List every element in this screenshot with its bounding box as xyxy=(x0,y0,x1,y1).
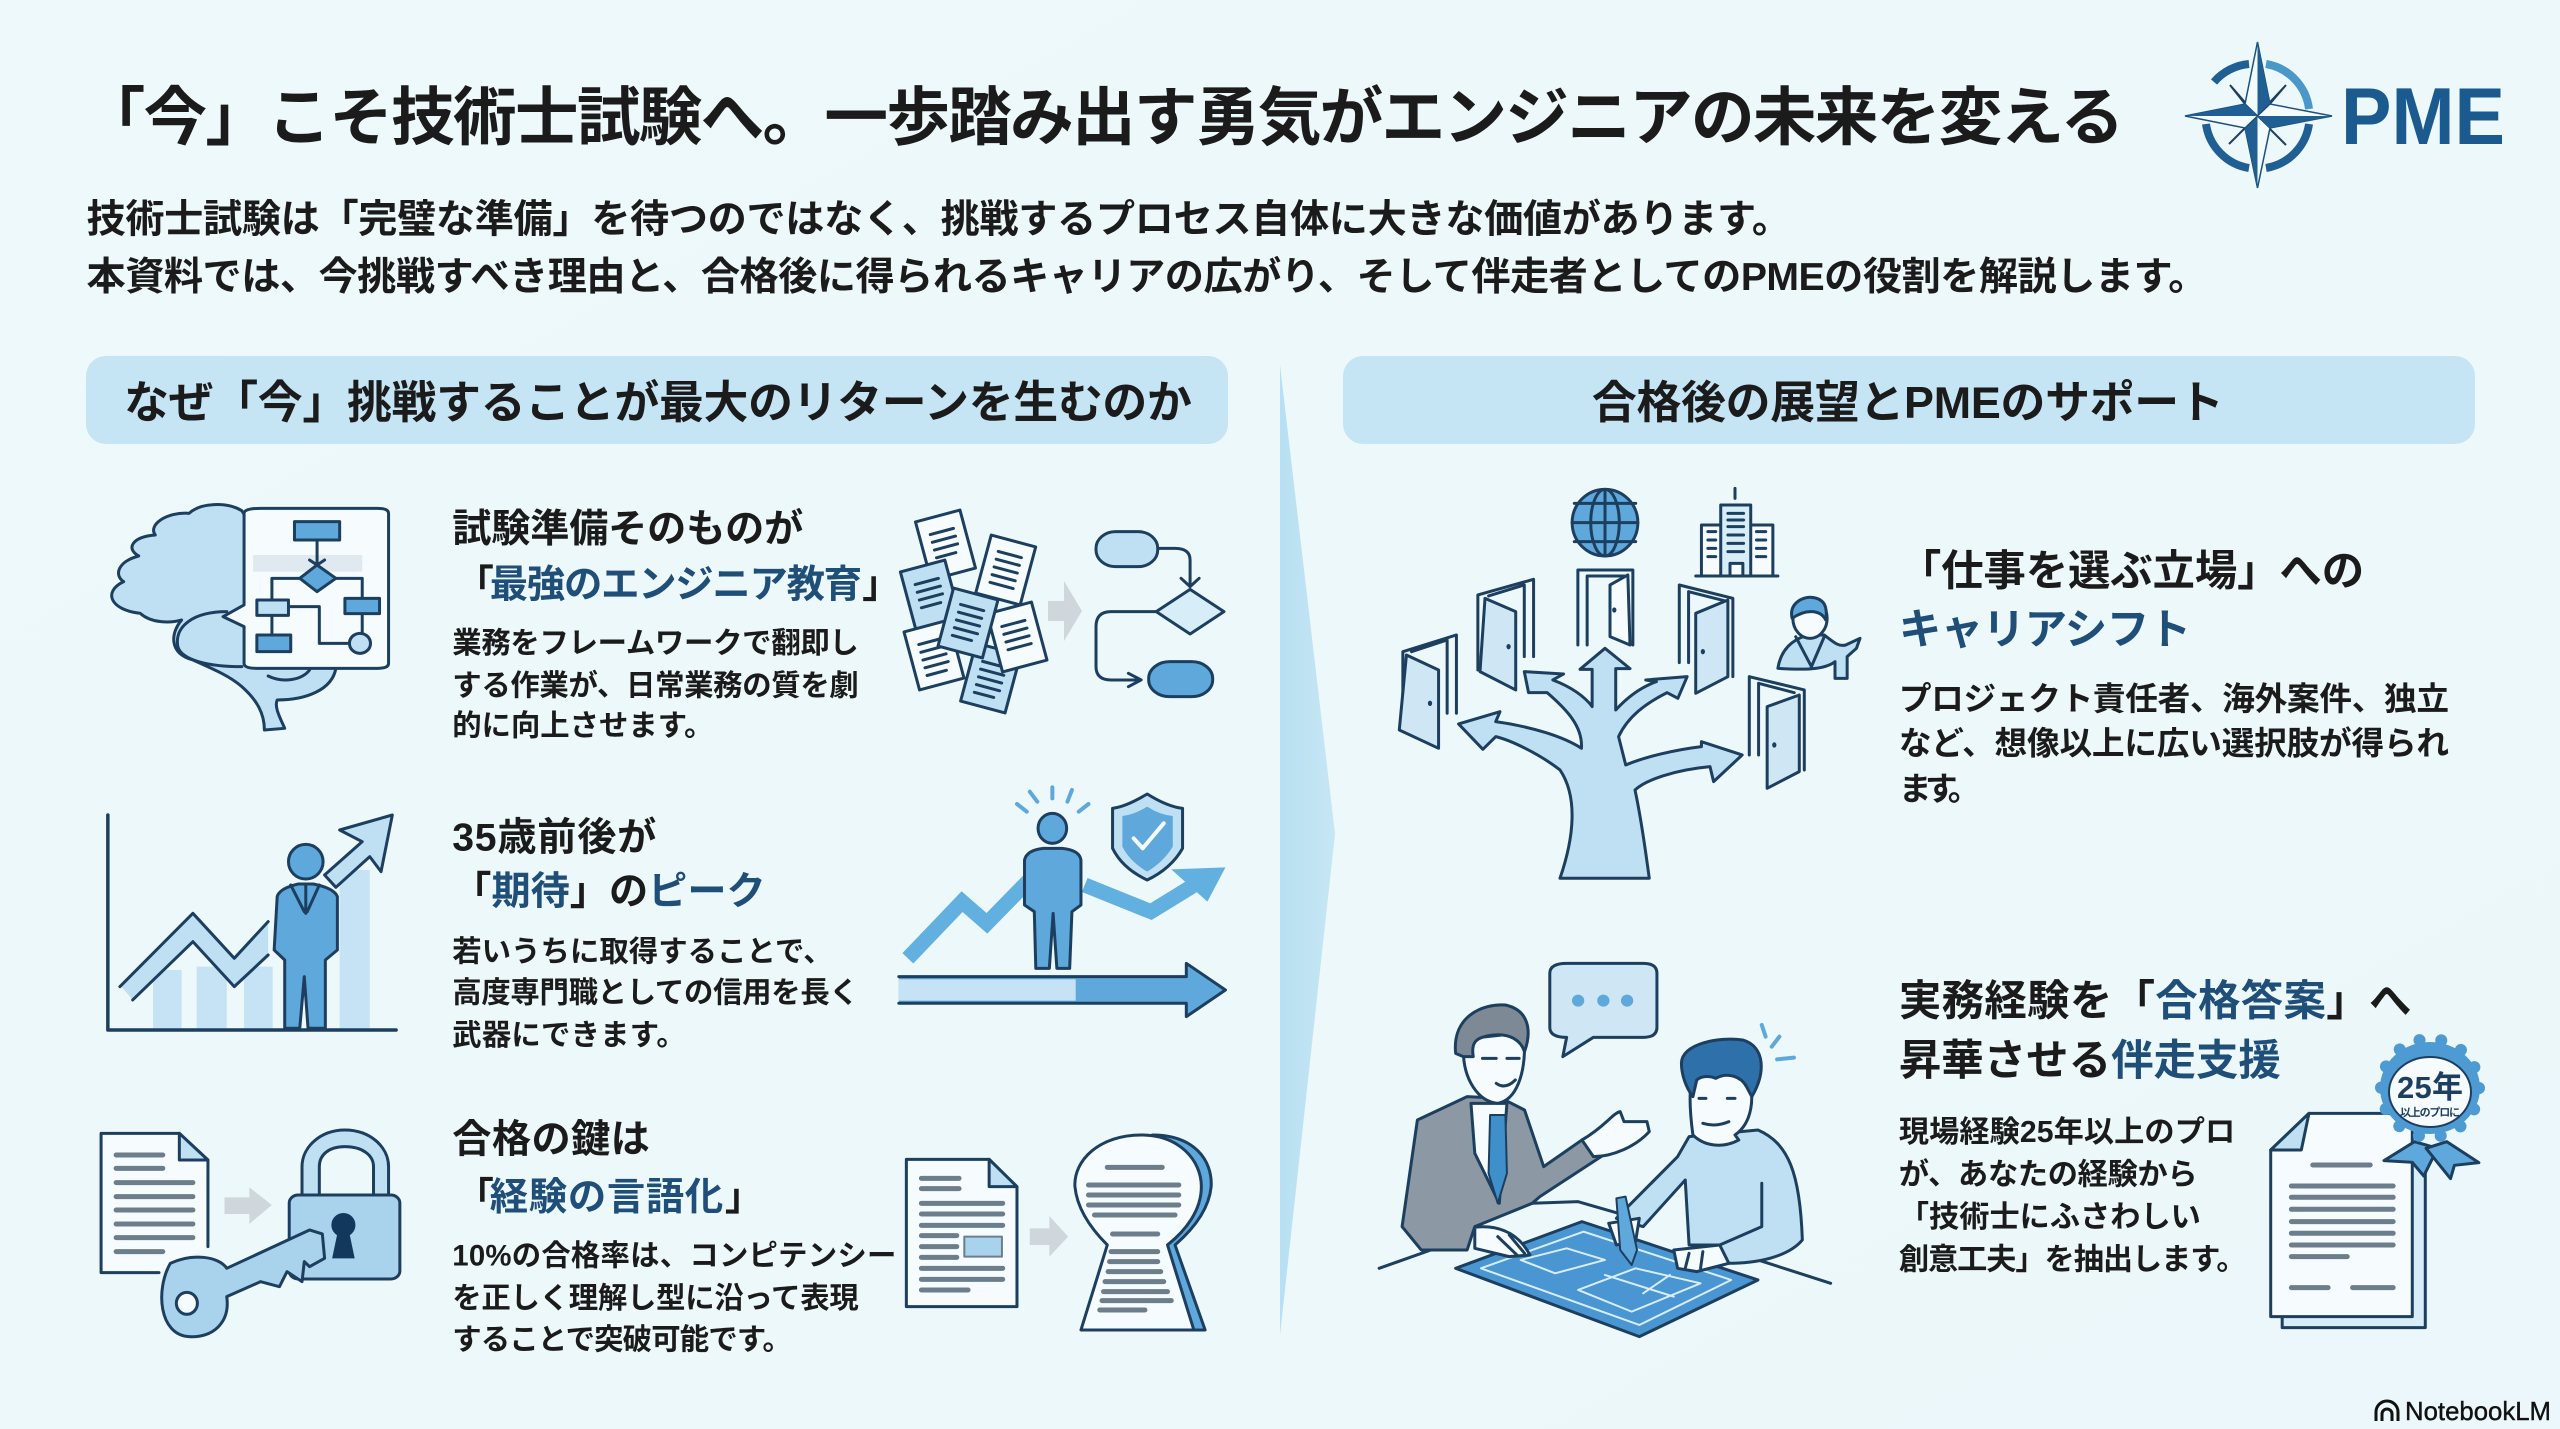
title: 「今」こそ技術士試験へ。一歩踏み出す勇気がエンジニアの未来を変える xyxy=(82,83,2124,154)
right item 1 text: ます。 xyxy=(1899,770,1980,807)
arrow: documents to flow xyxy=(1048,581,1082,641)
item 1 text: 的に向上させます。 xyxy=(452,710,713,743)
panel header: right xyxy=(1343,356,2475,444)
icon: brain with flowchart xyxy=(112,505,389,730)
globe xyxy=(1572,489,1638,556)
mentor xyxy=(1402,1005,1649,1250)
doors xyxy=(1399,570,1804,788)
right item 1 text: キャリアシフト xyxy=(1899,606,2191,653)
right item 2 text: が、あなたの経験から xyxy=(1899,1157,2198,1192)
heading: right panel: 合格後の展望とPMEのサポート xyxy=(1592,377,2224,428)
item 1 text xyxy=(452,508,900,743)
chart: growth with businessperson xyxy=(108,815,396,1030)
item 3 text: 経験の言語化 xyxy=(490,1176,723,1219)
building xyxy=(1696,488,1778,576)
right item 2 text: 昇華させる伴走支援 xyxy=(1899,1037,2281,1084)
illustration: mentor and engineer with blueprint xyxy=(1379,963,1831,1337)
tree arrows xyxy=(1459,648,1742,878)
blueprint xyxy=(1456,1222,1758,1337)
icon: certificate with award badge: 25年 xyxy=(2397,1070,2463,1105)
speech bubble xyxy=(1550,963,1657,1057)
panel header: left xyxy=(86,356,1228,444)
person xyxy=(1778,597,1860,678)
item 1 text: 業務をフレームワークで翻即し xyxy=(452,627,859,660)
item 2 text: 35歳前後が xyxy=(452,817,656,860)
item 3 text: 合格の鍵は xyxy=(452,1119,650,1162)
item 2 text: 若いうちに取得することで、 xyxy=(452,936,833,969)
right item 2 text: 創意工夫」を抽出します。 xyxy=(1899,1242,2247,1276)
right item 1 text xyxy=(1899,547,2449,807)
right item 2 text: 実務経験を「合格答案」へ xyxy=(1899,978,2411,1025)
item 3 text xyxy=(452,1119,896,1356)
icon: certificate with award badge: 以上のプロに xyxy=(2400,1106,2460,1119)
item 2 text: 高度専門職としての信用を長く xyxy=(452,976,859,1009)
item 1 text: 試験準備そのものが xyxy=(452,508,803,551)
icon: organised flow xyxy=(1096,532,1224,697)
icon: branching tree with doors xyxy=(1399,488,1860,878)
item 3 text: 」 xyxy=(725,1176,763,1219)
item 2 text: 武器にできます。 xyxy=(452,1019,686,1052)
item 1 text: する作業が、日常業務の質を劇 xyxy=(452,669,859,703)
icon: rising path with person and shield xyxy=(899,787,1225,1017)
logo: PME compass: PME xyxy=(2341,72,2505,162)
right item 2 text: 現場経験25年以上のプロ xyxy=(1899,1115,2235,1149)
intro text: 技術士試験は「完璧な準備」を待つのではなく、挑戦するプロセス自体に大きな価値があります。 xyxy=(87,199,1791,242)
right item 2 text xyxy=(1899,978,2411,1276)
mentor hand xyxy=(1475,1227,1530,1257)
icon: scattered documents xyxy=(900,510,1047,713)
intro text xyxy=(87,199,2207,299)
right item 1 text: 「仕事を選ぶ立場」への xyxy=(1899,547,2364,594)
right item 1 text: など、想像以上に広い選択肢が得られ xyxy=(1899,724,2449,761)
table lines xyxy=(1379,1202,1831,1283)
item 3 text: を正しく理解し型に沿って表現 xyxy=(452,1282,859,1315)
right item 2 text: 「技術士にふさわしい xyxy=(1899,1200,2201,1234)
icon: document to keyhole xyxy=(906,1135,1211,1330)
item 1 text: 」 xyxy=(862,564,900,607)
intro text: 本資料では、今挑戦すべき理由と、合格後に得られるキャリアの広がり、そして伴走者としてのPMEの役割を解説します。 xyxy=(87,256,2207,299)
item 3 text: 10%の合格率は、コンピテンシー xyxy=(452,1239,896,1272)
icon: document to key and lock xyxy=(101,1130,400,1337)
engineer xyxy=(1609,1039,1802,1272)
right item 1 text: プロジェクト責任者、海外案件、独立 xyxy=(1899,680,2449,717)
item 3 text: することで突破可能です。 xyxy=(452,1323,792,1356)
item 1 text: 「 xyxy=(456,564,494,607)
item 1 text: 最強のエンジニア教育 xyxy=(490,564,862,607)
item 2 text: 「期待」のピーク xyxy=(452,871,766,914)
logo: PME compass xyxy=(2185,42,2505,188)
item 3 text: 「 xyxy=(456,1176,494,1219)
item 2 text xyxy=(452,817,859,1052)
icon: certificate with award badge xyxy=(2271,1039,2480,1328)
divider arrow between panels xyxy=(1280,365,1335,1335)
heading: left panel: なぜ「今」挑戦することが最大のリターンを生むのか xyxy=(124,377,1192,428)
NotebookLM mark: NotebookLM xyxy=(2405,1396,2551,1426)
